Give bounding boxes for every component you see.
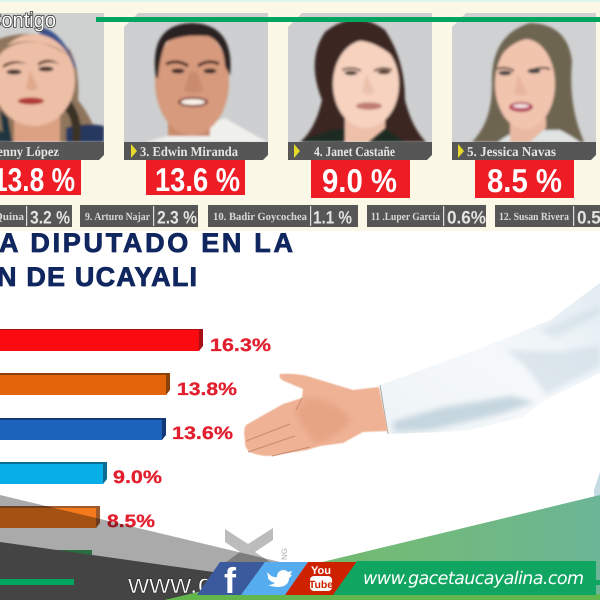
name plate (0, 142, 104, 160)
social banner (197, 560, 600, 600)
candidate 10: 10. Badir Goycochea (213, 211, 307, 223)
icon: facebook (197, 560, 265, 600)
website partly hidden: www.g (127, 569, 214, 599)
man's torso edge (594, 472, 600, 560)
candidate 11: 0.6% (447, 208, 486, 228)
arm and hand (244, 283, 600, 456)
green accent line (0, 579, 74, 585)
bar: 9.0% (0, 462, 162, 487)
portrait: Edwin Miranda (124, 13, 268, 142)
top green line (96, 17, 600, 22)
bar: hidden sixth bar (0, 550, 92, 562)
heading (0, 228, 293, 292)
newspaper background (0, 0, 600, 231)
bar: 13.8% (0, 373, 237, 399)
candidate 12 (495, 205, 600, 228)
percentage: 13.6 % (155, 161, 240, 198)
candidate 8 (0, 205, 72, 228)
candidate 9 (80, 205, 198, 228)
name plate (124, 142, 268, 160)
candidate 10: 1.1 % (313, 208, 352, 228)
hand (244, 374, 388, 456)
watermark X (225, 528, 273, 566)
heading: A DIPUTADO EN LA (0, 228, 293, 258)
sleeve (380, 283, 600, 434)
name plate: 5. Jessica Navas (467, 144, 556, 159)
dark corner banner (0, 542, 225, 600)
portrait: Jenny López (0, 13, 104, 142)
grey corner banner (0, 495, 290, 600)
bar: 13.6%: 13.6% (172, 423, 233, 443)
panel: candidate 5 Jessica Navas (452, 13, 596, 199)
portrait: Jessica Navas (452, 13, 596, 142)
candidate 9: 2.3 % (157, 208, 197, 228)
name plate (452, 142, 596, 160)
percentage: 8.5 % (487, 162, 562, 199)
bar: 13.8%: 13.8% (177, 379, 237, 399)
icon: facebook: f (224, 560, 237, 600)
candidate 9: 9. Arturo Najar (85, 211, 150, 223)
bar: 13.6% (0, 418, 233, 443)
icon: youtube: You (311, 565, 331, 577)
portrait: Janet Castañe (288, 13, 432, 142)
icon: youtube: Tube (309, 579, 333, 591)
panel: candidate 3 Edwin Miranda (124, 13, 268, 198)
percentage: 9.0 % (322, 162, 397, 199)
website banner (333, 561, 596, 595)
icon: twitter (241, 562, 308, 595)
vertical watermark label: NG (280, 548, 289, 560)
green wedge (165, 495, 600, 600)
candidate 11 (367, 205, 486, 228)
website banner: www.gacetaucayalina.com (363, 569, 584, 589)
icon: youtube (285, 562, 357, 595)
name plate: 4. Janet Castañe (314, 144, 395, 159)
candidate 8: 3.2 % (30, 208, 70, 228)
candidate 11: 11 .Luper García (371, 211, 440, 223)
bar: 8.5%: 8.5% (107, 511, 155, 531)
panel: candidate 2 Jenny López (0, 13, 104, 198)
heading: N DE UCAYALI (0, 262, 197, 292)
bar: 16.3%: 16.3% (210, 335, 271, 355)
bar chart (0, 329, 271, 562)
name plate: 3. Edwin Miranda (140, 144, 238, 159)
panel: candidate 4 Janet Castañe (288, 13, 432, 199)
name plate (288, 142, 432, 160)
bar: 16.3% (0, 329, 271, 355)
row of minor candidates (0, 205, 600, 228)
candidate 10 (208, 205, 358, 228)
bar: 8.5% (0, 506, 155, 531)
candidate 12: 12. Susan Rivera (499, 211, 569, 223)
bar: 9.0%: 9.0% (113, 467, 162, 487)
